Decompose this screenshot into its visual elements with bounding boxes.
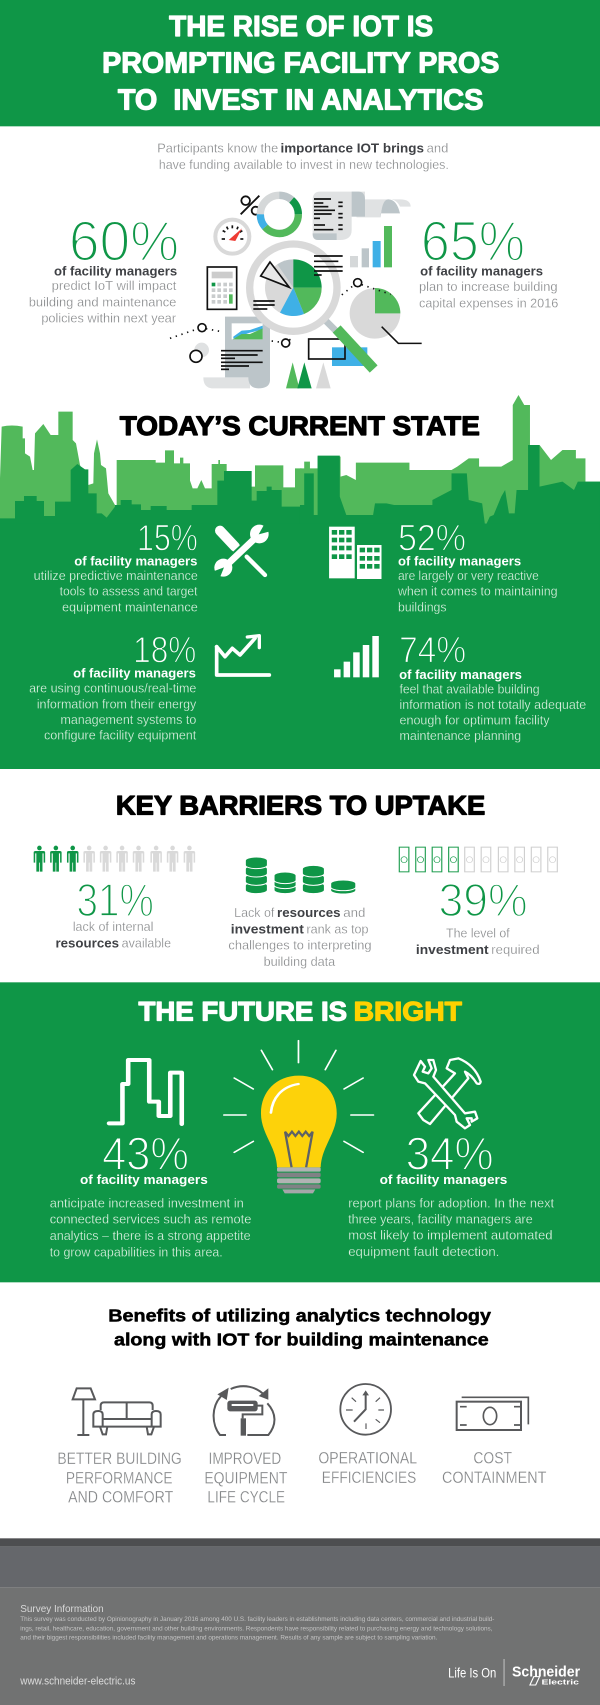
chart: donut xyxy=(260,195,298,234)
icon: paint roller cycle xyxy=(214,1386,274,1436)
icon: clock xyxy=(340,1384,391,1435)
benefit labels: COST xyxy=(473,1449,512,1467)
stat: 52%: are largely or very reactive xyxy=(398,569,539,584)
stat: 43%: anticipate increased investment in xyxy=(50,1196,244,1211)
stat: 74%: 74% xyxy=(399,630,466,671)
stat: 31%: available xyxy=(122,936,171,951)
heading: BRIGHT xyxy=(354,997,462,1027)
stat: 34%: 34% xyxy=(406,1128,494,1180)
text: top challenges: challenges to interpreting xyxy=(228,939,372,953)
stat: 52%: 52% xyxy=(398,518,466,559)
benefit labels: CONTAINMENT xyxy=(442,1468,547,1487)
icon: buildings xyxy=(329,527,382,579)
stat: 39% xyxy=(416,874,540,958)
chart: right pie and dotted line xyxy=(305,279,422,343)
footer xyxy=(0,1538,600,1705)
stat: 39%: The level of xyxy=(446,927,510,941)
stat: 43%: 43% xyxy=(102,1128,189,1180)
stat: 74%: of facility managers xyxy=(399,668,522,683)
benefit labels: EFFICIENCIES xyxy=(322,1468,416,1487)
logo: Life Is On Schneider Electric: Life Is On xyxy=(448,1665,496,1681)
stat: 15%: of facility managers xyxy=(74,555,197,569)
benefit labels: EQUIPMENT xyxy=(204,1468,288,1487)
chart: small bars xyxy=(350,226,392,267)
survey information xyxy=(20,1604,495,1642)
survey information: ings, retail, healthcare, education, government and other building environments. Respondents have responsibility related to purchasing energy and technology solutions, xyxy=(20,1625,492,1632)
stat: 18%: configure facility equipment xyxy=(44,729,196,743)
heading: KEY BARRIERS TO UPTAKE xyxy=(116,791,485,821)
stat: 60%: policies within next year xyxy=(41,312,176,326)
intro text xyxy=(157,141,449,173)
icon: city outline xyxy=(109,1060,182,1124)
stat: 65%: plan to increase building xyxy=(419,280,558,295)
text: top challenges: building data xyxy=(264,955,335,970)
stat: 34% xyxy=(348,1128,554,1260)
stat: 60%: predict IoT will impact xyxy=(52,279,176,294)
icon: coin stacks xyxy=(245,857,356,894)
survey information: This survey was conducted by Opinionography in January 2016 among 400 U.S. facility leaders in establishments including data centers, commercial and industrial build- xyxy=(20,1615,495,1623)
stat: 15%: tools to assess and target xyxy=(60,585,197,599)
stat: 74%: enough for optimum facility xyxy=(399,713,550,728)
panel: title banner xyxy=(0,0,600,126)
panel: benefits and footer xyxy=(0,1280,600,1705)
text: top challenges: investment xyxy=(231,922,304,937)
title: PROMPTING FACILITY PROS xyxy=(102,47,499,79)
stat: 39%: 39% xyxy=(439,874,528,926)
illustration: analytics magnifier collage xyxy=(170,192,422,388)
stat: 18%: 18% xyxy=(133,630,196,671)
stat: 52% xyxy=(397,518,558,615)
stat: 52%: buildings xyxy=(398,600,447,615)
stat: 74%: feel that available building xyxy=(399,682,540,697)
stat: 31%: resources xyxy=(55,936,119,951)
logo: Life Is On Schneider Electric: Electric xyxy=(541,1678,580,1686)
icon: calculator xyxy=(207,267,237,309)
icon: money bills row xyxy=(399,847,557,872)
stat: 34%: of facility managers xyxy=(380,1173,507,1188)
benefit labels: LIFE CYCLE xyxy=(207,1488,285,1506)
icon: tools xyxy=(213,523,271,579)
text: top challenges xyxy=(228,906,372,970)
text: top challenges: resources xyxy=(277,906,341,921)
stat: 39%: required xyxy=(491,943,540,958)
connector dots and circles xyxy=(170,324,292,362)
illustration: city skyline xyxy=(0,395,600,530)
icon: line chart arrow xyxy=(217,636,269,675)
icon: magnifying glass with pie chart xyxy=(250,244,374,369)
stat: 60%: 60% xyxy=(69,210,179,273)
benefit labels: IMPROVED xyxy=(209,1449,281,1468)
website: www.schneider-electric.us xyxy=(19,1674,135,1687)
stat: 74%: maintenance planning xyxy=(399,729,521,744)
text: top challenges: rank as top xyxy=(307,922,369,937)
icon: signal bars xyxy=(334,636,379,677)
icon: gauge xyxy=(215,220,249,254)
stat: 60% xyxy=(29,210,179,326)
icon: wrench and hammer outline xyxy=(414,1058,481,1128)
benefit labels: OPERATIONAL xyxy=(318,1449,417,1467)
heading: along with IOT for building maintenance xyxy=(114,1330,489,1350)
icon: triangles xyxy=(286,362,331,388)
stat: 74% xyxy=(399,630,586,744)
stat: 18%: management systems to xyxy=(60,713,196,728)
stat: 43%: of facility managers xyxy=(80,1173,208,1188)
icon: people row xyxy=(34,846,195,872)
stat: 31%: lack of internal xyxy=(73,920,153,935)
intro text: Participants know the xyxy=(157,141,278,156)
stat: 15%: utilize predictive maintenance xyxy=(34,569,198,584)
stat: 65%: 65% xyxy=(421,210,525,273)
stat: 34%: equipment fault detection. xyxy=(348,1245,499,1260)
stat: 15%: 15% xyxy=(137,518,198,559)
survey information: and their biggest responsibilities included facility management and operations management. Results of any sample are subject to sampling variation. xyxy=(20,1634,437,1642)
icon: money xyxy=(457,1397,528,1430)
heading xyxy=(108,1306,491,1350)
stat: 15%: equipment maintenance xyxy=(62,600,198,615)
stat: 18% xyxy=(29,630,197,743)
icon: receipt scroll xyxy=(313,192,411,240)
stat: 39%: investment xyxy=(416,943,489,958)
title: THE RISE OF IOT IS xyxy=(169,10,433,43)
panel: key barriers xyxy=(0,791,600,1282)
panel: today's current state xyxy=(0,412,600,769)
heading: TODAY’S CURRENT STATE xyxy=(120,412,480,442)
stat: 52%: when it comes to maintaining xyxy=(397,585,558,599)
intro text: have funding available to invest in new technologies. xyxy=(159,158,449,173)
stat: 18%: of facility managers xyxy=(73,667,196,681)
stat: 43%: connected services such as remote xyxy=(50,1213,251,1227)
logo: Life Is On Schneider Electric: Schneider xyxy=(512,1665,580,1680)
stat: 31% xyxy=(55,874,171,951)
benefit labels: AND COMFORT xyxy=(68,1488,174,1506)
icon: lamp and sofa xyxy=(73,1388,161,1435)
survey information: Survey Information xyxy=(20,1604,104,1615)
stat: 34%: most likely to implement automated xyxy=(348,1229,553,1243)
text: top challenges: Lack of xyxy=(234,906,274,921)
stat: 52%: of facility managers xyxy=(398,555,521,569)
stat: 43%: to grow capabilities in this area. xyxy=(50,1245,223,1260)
intro text: importance IOT brings xyxy=(280,141,424,156)
icon: light bulb with rays xyxy=(224,1041,373,1193)
stat: 65%: of facility managers xyxy=(420,265,543,279)
heading: Benefits of utilizing analytics technology xyxy=(108,1306,491,1326)
stat: 60%: building and maintenance xyxy=(29,295,176,310)
stat: 34%: report plans for adoption. In the next xyxy=(348,1196,554,1211)
panel: the future is bright xyxy=(0,982,600,1282)
stat: 43% xyxy=(50,1128,251,1260)
logo: Life Is On Schneider Electric xyxy=(448,1659,580,1686)
benefit labels: BETTER BUILDING xyxy=(57,1449,182,1468)
stat: 60%: of facility managers xyxy=(54,265,177,279)
title xyxy=(102,10,499,116)
stat: 65% xyxy=(419,210,558,311)
stat: 18%: are using continuous/real-time xyxy=(29,682,196,696)
benefit labels xyxy=(57,1449,547,1506)
stat: 18%: information from their energy xyxy=(37,697,197,712)
icon: document with chart xyxy=(203,317,270,388)
stat: 31%: 31% xyxy=(77,874,154,926)
stat: 65%: capital expenses in 2016 xyxy=(419,296,558,311)
stat: 43%: analytics – there is a strong appetite xyxy=(50,1229,251,1244)
intro text: and xyxy=(427,141,448,156)
text: top challenges: and xyxy=(343,906,365,921)
icon: percent sign xyxy=(241,196,260,215)
stat: 34%: three years, facility managers are xyxy=(348,1212,533,1227)
panel: introduction xyxy=(29,141,558,326)
stat: 15% xyxy=(34,518,198,615)
title: TO INVEST IN ANALYTICS xyxy=(118,84,483,116)
benefit labels: PERFORMANCE xyxy=(66,1468,173,1487)
heading: THE FUTURE IS xyxy=(139,997,347,1027)
